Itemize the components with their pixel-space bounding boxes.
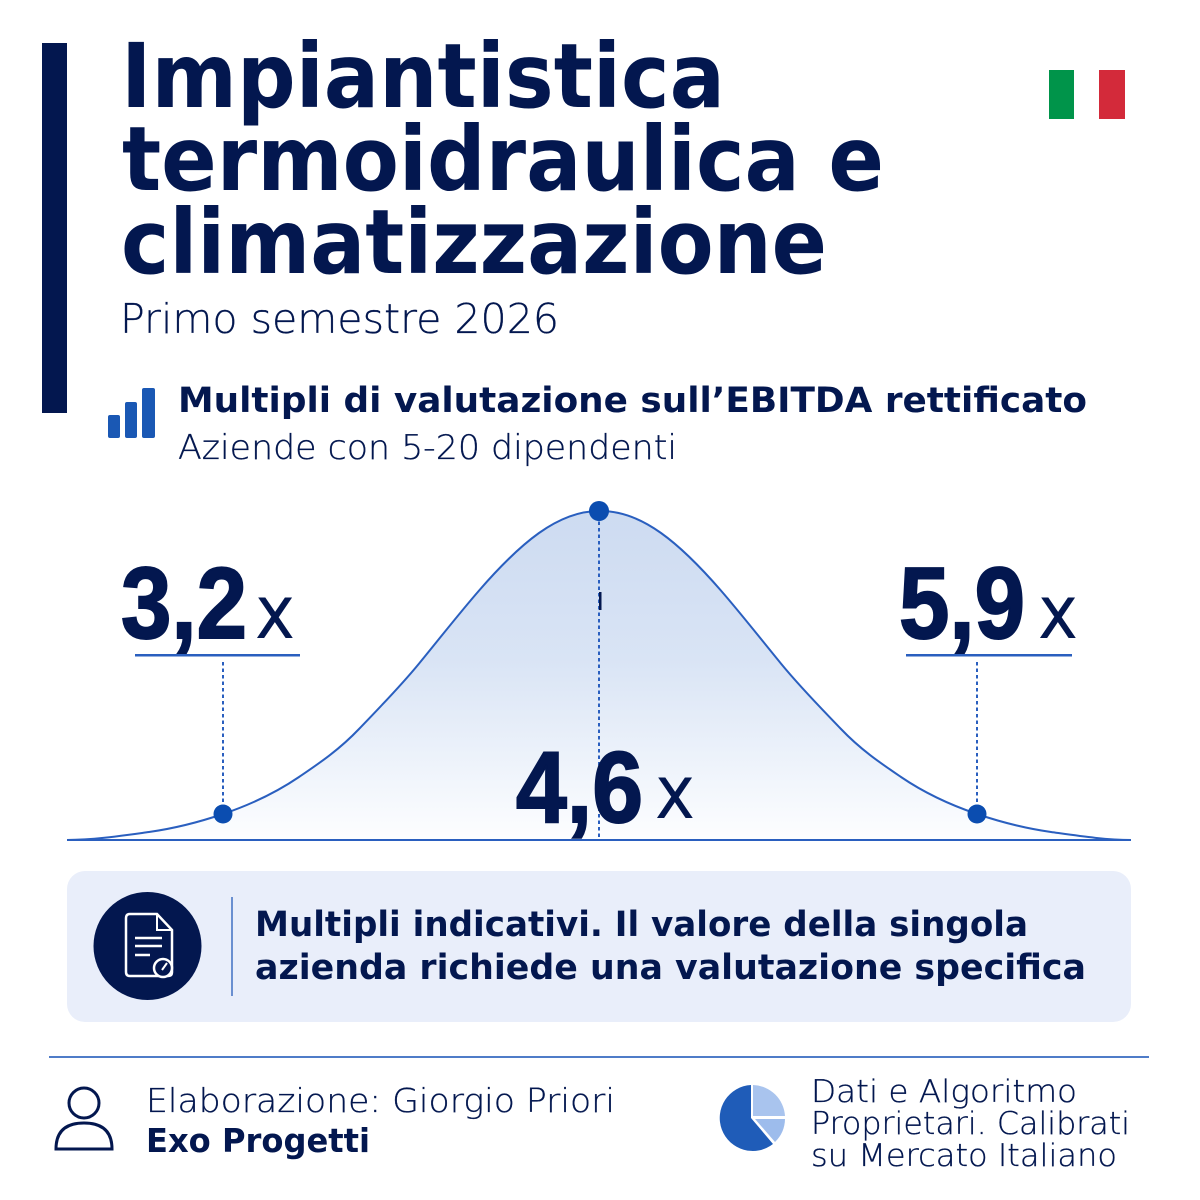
data source note: su Mercato Italiano bbox=[811, 1138, 1117, 1174]
top marker bbox=[589, 501, 609, 521]
icon: bar chart bbox=[108, 388, 155, 438]
divider bbox=[231, 897, 233, 996]
author credit bbox=[146, 1081, 615, 1160]
data source note: Dati e Algoritmo bbox=[811, 1074, 1077, 1110]
left dashed line bbox=[222, 662, 224, 810]
data source note: Proprietari. Calibrati bbox=[811, 1106, 1130, 1142]
icon: person bbox=[56, 1088, 112, 1149]
value: low multiple 3,2x: 3,2 bbox=[121, 548, 247, 660]
baseline axis bbox=[67, 839, 1131, 841]
data source note bbox=[811, 1074, 1130, 1174]
median tick bbox=[599, 592, 602, 610]
footer rule bbox=[49, 1056, 1149, 1058]
right dashed line bbox=[976, 662, 978, 810]
right marker bbox=[968, 804, 986, 824]
section subheading: Aziende con 5-20 dipendenti bbox=[178, 428, 677, 468]
curve line bbox=[67, 511, 1131, 840]
value: low multiple 3,2x: x bbox=[255, 570, 295, 656]
disclaimer text bbox=[255, 905, 1086, 988]
section heading: Multipli di valutazione sull’EBITDA rettificato bbox=[178, 381, 1087, 421]
author credit: Exo Progetti bbox=[146, 1121, 370, 1160]
title bbox=[121, 24, 884, 294]
value: median multiple 4,6x: x bbox=[655, 750, 695, 836]
title: termoidraulica e bbox=[122, 107, 884, 211]
panel: disclaimer bbox=[67, 871, 1131, 1022]
icon: document bbox=[94, 892, 202, 1000]
disclaimer text: azienda richiede una valutazione specifica bbox=[255, 948, 1086, 988]
subtitle: Primo semestre 2026 bbox=[120, 295, 559, 343]
value: high multiple 5,9x: 5,9 bbox=[899, 548, 1025, 660]
icon: Italian flag bbox=[1049, 70, 1125, 119]
disclaimer text: Multipli indicativi. Il valore della singola bbox=[255, 905, 1028, 945]
title: climatizzazione bbox=[121, 190, 827, 294]
curve fill bbox=[67, 511, 1131, 840]
median dashed line bbox=[598, 515, 600, 840]
title: Impiantistica bbox=[121, 24, 725, 128]
value: high multiple 5,9x: x bbox=[1038, 570, 1078, 656]
author credit: Elaborazione: Giorgio Priori bbox=[146, 1081, 615, 1120]
accent bar bbox=[42, 43, 67, 413]
icon: pie chart bbox=[720, 1085, 785, 1151]
bell curve chart bbox=[67, 501, 1131, 840]
value: median multiple 4,6x: 4,6 bbox=[516, 732, 643, 844]
left marker bbox=[214, 804, 232, 824]
